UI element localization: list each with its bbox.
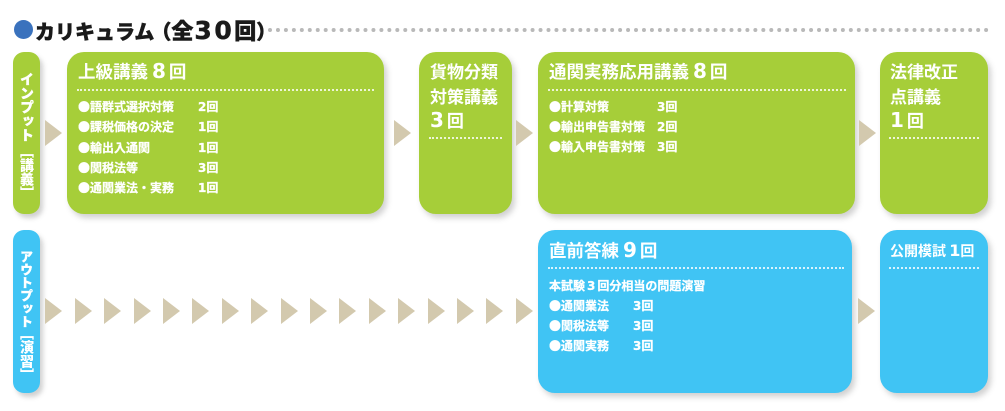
heading: 直前答練 9回 [549, 238, 657, 263]
item: ●課税価格の決定 [78, 118, 174, 135]
divider [889, 267, 979, 269]
divider [548, 89, 846, 91]
heading [890, 58, 958, 132]
arrow [45, 120, 62, 146]
item: ●計算対策 [549, 98, 609, 115]
item [78, 118, 218, 135]
heading: 点講義 [890, 82, 941, 108]
heading: 公開模試 1回 [890, 241, 974, 261]
item: 3回 [633, 317, 653, 334]
item: ●通関業法・実務 [78, 179, 174, 196]
item [78, 98, 218, 115]
item: 2回 [198, 98, 218, 115]
input label text: インプット [17, 72, 37, 142]
panel: output label [13, 230, 40, 393]
arrow [516, 120, 533, 146]
panel: goods classification [419, 52, 512, 214]
item [78, 179, 218, 196]
panel: input label [13, 52, 40, 214]
item [549, 297, 653, 314]
list: topics [78, 98, 218, 196]
item: 3回 [633, 297, 653, 314]
divider [429, 137, 502, 139]
item: ●輸出入通関 [78, 139, 150, 156]
heading: 対策講義 [430, 82, 498, 108]
arrow [858, 298, 875, 324]
item: 1回 [198, 179, 218, 196]
list: topics [549, 297, 653, 354]
arrows: output sequence [45, 298, 533, 324]
heading: 3回 [430, 107, 464, 132]
list: topics [549, 98, 677, 155]
item: ●輸入申告書対策 [549, 138, 645, 155]
output label text: アウトプット [17, 250, 36, 328]
item: ●輸出申告書対策 [549, 118, 645, 135]
panel: public mock exam [880, 230, 988, 393]
item: 3回 [633, 337, 653, 354]
divider [548, 267, 844, 269]
title [14, 14, 276, 46]
item [549, 317, 653, 334]
subheading: 本試験3回分相当の問題演習 [549, 277, 705, 294]
heading: 法律改正 [890, 58, 958, 83]
item: 1回 [198, 139, 218, 156]
item: 3回 [657, 98, 677, 115]
heading [430, 58, 498, 132]
item [78, 159, 218, 176]
item [78, 139, 218, 156]
item: ●関税法等 [549, 317, 609, 334]
item: ●語群式選択対策 [78, 98, 174, 115]
item: ●関税法等 [78, 159, 138, 176]
heading: 上級講義 8回 [78, 59, 186, 84]
arrow [394, 120, 411, 146]
heading: 1回 [890, 107, 924, 132]
panel: customs practice [538, 52, 855, 214]
item: 3回 [198, 159, 218, 176]
item: ●通関業法 [549, 297, 609, 314]
panel: final practice [538, 230, 852, 393]
title text: カリキュラム（全30回） [35, 14, 276, 46]
item [549, 337, 653, 354]
item [549, 98, 677, 115]
heading: 通関実務応用講義 8回 [549, 59, 727, 84]
divider [889, 137, 979, 139]
item: 1回 [198, 118, 218, 135]
output sublabel text: ［演習］ [17, 326, 37, 382]
title dotted rule [268, 28, 989, 32]
item: 3回 [657, 138, 677, 155]
input sublabel text: ［講義］ [17, 144, 37, 200]
heading: 貨物分類 [430, 58, 498, 83]
divider [77, 89, 374, 91]
panel: law revision [880, 52, 988, 214]
arrow [859, 120, 876, 146]
icon: blue bullet [14, 20, 33, 39]
item: ●通関実務 [549, 337, 609, 354]
panel: advanced lectures [67, 52, 384, 214]
item: 2回 [657, 118, 677, 135]
